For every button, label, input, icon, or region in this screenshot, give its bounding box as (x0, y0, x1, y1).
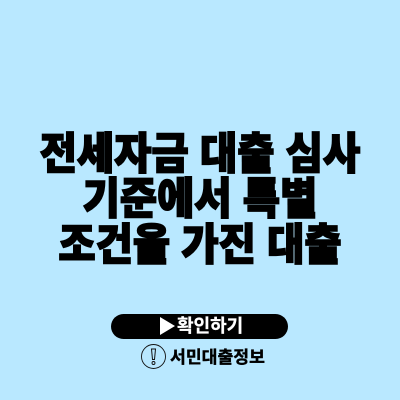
button: confirm (111, 314, 288, 339)
title: 전세자금 대출 심사 (40, 129, 360, 179)
title: 조건을 가진 대출 (58, 220, 342, 270)
brand label: 서민대출정보 (170, 347, 265, 367)
button label: 확인하기 (177, 316, 243, 336)
title (40, 129, 360, 270)
title: 기준에서 특별 (83, 174, 317, 224)
icon: play triangle (160, 317, 175, 335)
icon: exclamation circle (141, 344, 166, 369)
